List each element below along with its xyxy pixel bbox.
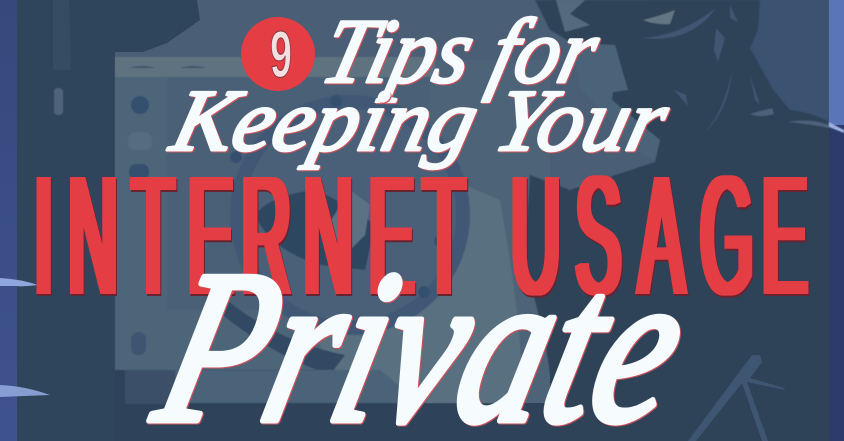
illustration: computer case [54,57,435,404]
side strip: right [829,0,844,441]
heading: Keeping Your: Keeping Your [161,72,679,170]
badge: 9: 9 [270,18,292,92]
heading: Internet Usage: INTERNETUSAGE [34,142,807,331]
illustration: crack lines [688,355,785,441]
badge: 9 [241,17,315,92]
heading: Tips for: Tips for [313,1,609,103]
illustration: disc ring [175,95,522,403]
side strip: left [0,0,50,441]
illustration: hooded figure [525,0,844,441]
